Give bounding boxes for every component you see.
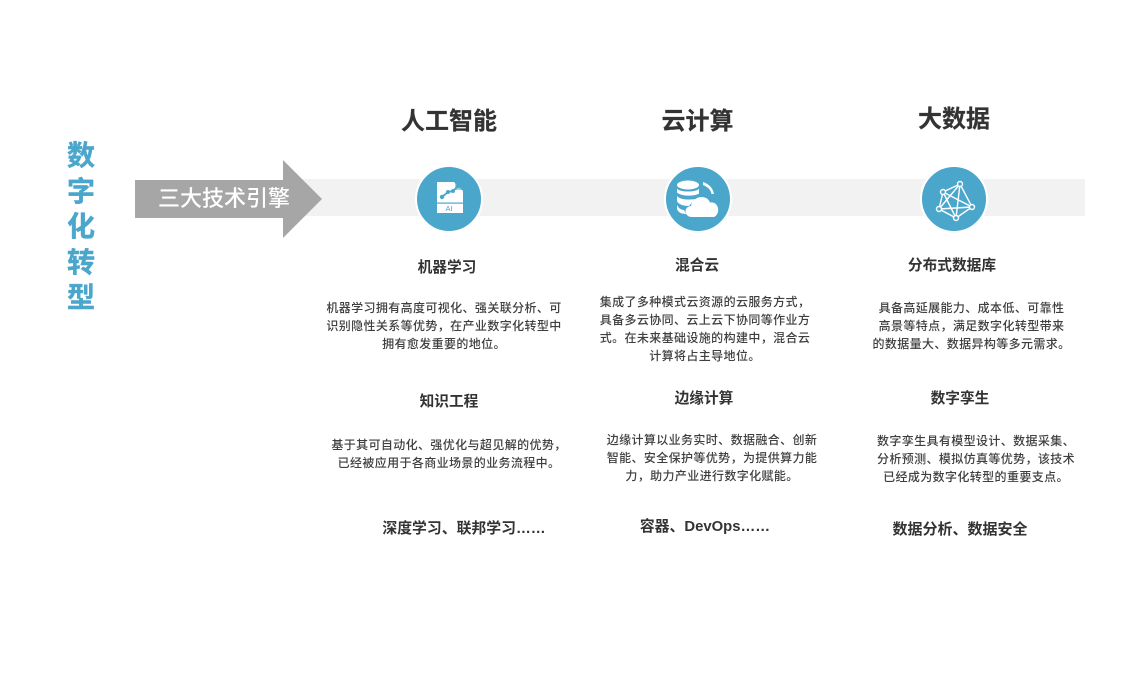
text: knowledge engineering: 基于其可自动化、强优化与超见解的优势， <box>331 438 567 452</box>
icon: network nodes <box>920 167 988 231</box>
text: distributed database <box>872 301 1071 351</box>
text: digital twin: 数字孪生具有模型设计、数据采集、 <box>877 434 1075 448</box>
text: digital twin: 分析预测、模拟仿真等优势，该技术 <box>877 452 1075 466</box>
heading: big data: 大数据 <box>918 106 990 133</box>
text: machine learning: 机器学习拥有高度可视化、强关联分析、可 <box>326 301 562 315</box>
icon: AI document: AI <box>445 204 453 213</box>
background band <box>283 179 1085 216</box>
text: hybrid cloud <box>600 295 810 363</box>
text: distributed database: 具备高延展能力、成本低、可靠性 <box>879 301 1064 315</box>
more: data analysis: 数据分析、数据安全 <box>892 521 1028 538</box>
text: distributed database: 高景等特点，满足数字化转型带来 <box>879 319 1064 333</box>
arrow: three technology engines <box>135 160 322 238</box>
vertical title: 数 <box>67 140 95 171</box>
text: hybrid cloud: 式。在未来基础设施的构建中，混合云 <box>600 331 810 345</box>
vertical title: 化 <box>67 211 95 242</box>
more: containers: 容器、DevOps…… <box>640 519 770 535</box>
text: edge computing <box>607 433 817 483</box>
text: digital twin <box>877 434 1075 484</box>
text: digital twin: 已经成为数字化转型的重要支点。 <box>883 470 1069 484</box>
text: machine learning: 拥有愈发重要的地位。 <box>382 337 506 351</box>
subheading: edge computing: 边缘计算 <box>675 391 733 407</box>
more: deep learning: 深度学习、联邦学习…… <box>382 521 546 537</box>
text: hybrid cloud: 计算将占主导地位。 <box>649 349 761 363</box>
heading: cloud computing: 云计算 <box>662 108 734 135</box>
heading: AI: 人工智能 <box>401 108 497 135</box>
subheading: distributed database: 分布式数据库 <box>908 258 996 274</box>
arrow: three technology engines: 三大技术引擎 <box>158 186 290 211</box>
text: machine learning <box>326 301 562 351</box>
text: edge computing: 力，助力产业进行数字化赋能。 <box>625 469 799 483</box>
vertical title: 转 <box>67 246 95 278</box>
subheading: digital twin: 数字孪生 <box>931 391 989 407</box>
text: hybrid cloud: 具备多云协同、云上云下协同等作业方 <box>600 313 810 327</box>
vertical title: 字 <box>67 176 95 206</box>
text: hybrid cloud: 集成了多种模式云资源的云服务方式， <box>600 295 810 309</box>
text: machine learning: 识别隐性关系等优势，在产业数字化转型中 <box>326 319 562 333</box>
text: distributed database: 的数据量大、数据异构等多元需求。 <box>872 337 1071 351</box>
text: edge computing: 智能、安全保护等优势，为提供算力能 <box>607 451 817 465</box>
vertical title: 型 <box>67 282 95 313</box>
vertical title <box>67 140 95 313</box>
text: knowledge engineering: 已经被应用于各商业场景的业务流程中。 <box>338 456 560 470</box>
subheading: hybrid cloud: 混合云 <box>675 258 719 274</box>
text: knowledge engineering <box>331 438 567 470</box>
icon: cloud database <box>664 167 732 231</box>
subheading: machine learning: 机器学习 <box>418 260 476 276</box>
text: edge computing: 边缘计算以业务实时、数据融合、创新 <box>607 433 817 447</box>
subheading: knowledge engineering: 知识工程 <box>420 394 478 410</box>
icon: AI document <box>415 167 483 231</box>
